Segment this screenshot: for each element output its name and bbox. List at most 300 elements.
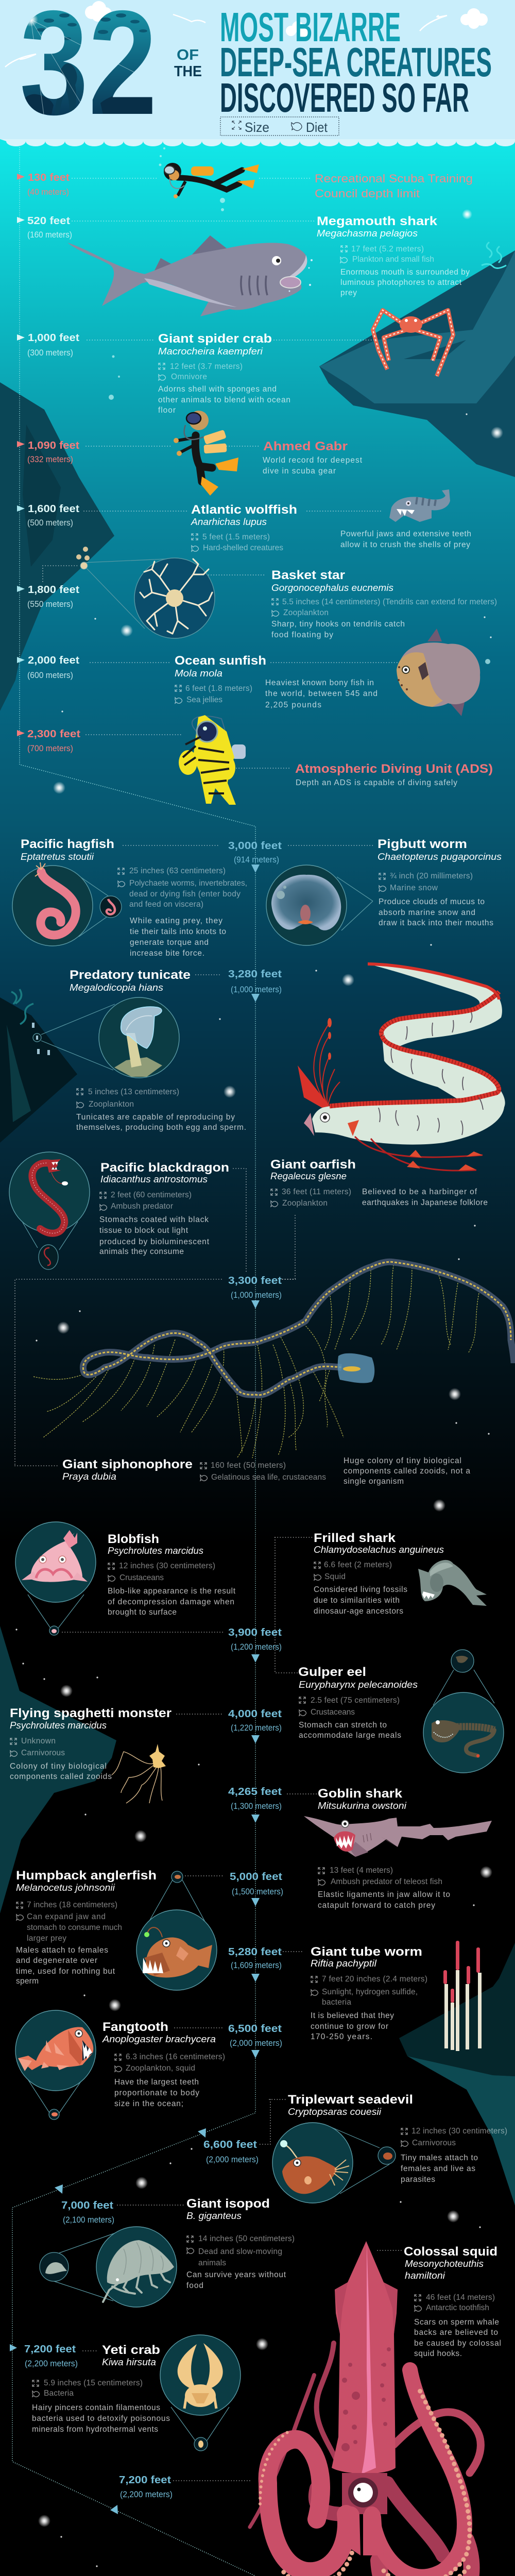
marker: 1090 feet [17, 441, 25, 447]
text: facts: sperm [16, 1977, 39, 1986]
text: facts: generate torque and [130, 938, 209, 947]
text: facts: females and live as [401, 2164, 475, 2173]
panel: pacific blackdragon: Idiacanthus antrostomus [100, 1174, 208, 1184]
name: Flying spaghetti monster [10, 1706, 171, 1720]
marker: 4000 feet: 4,000 feet [228, 1708, 282, 1720]
text: facts: 6.3 inches (16 centimeters) [126, 2053, 225, 2061]
panel: ahmed gabr [17, 411, 363, 496]
text: facts: time, used for nothing but [16, 1967, 115, 1976]
text: facts: Carnivorous [412, 2139, 456, 2147]
rock: left upper [0, 382, 114, 711]
marker: 6500 feet: (2,000 meters) [230, 2039, 282, 2048]
text: record [263, 456, 363, 476]
name: Megamouth shark [317, 214, 438, 228]
arm: main looping arms [260, 2370, 471, 2576]
text: facts [271, 1188, 488, 1208]
panel: atlantic wolffish: (500 meters) [27, 518, 73, 528]
text: facts: catapult forward to catch prey [318, 1901, 435, 1910]
clouds and birds [5, 1, 488, 67]
illustration: yeti crab zoom [160, 2335, 241, 2451]
illustration: colossal squid [250, 2241, 480, 2576]
panel: pacific blackdragon [9, 1152, 246, 1272]
text: facts: allow it to crush the shells of prey [340, 540, 470, 549]
text: facts [108, 1562, 236, 1617]
marker: 3000 feet: 3,000 feet [228, 840, 282, 852]
text: facts: absorb marine snow and [379, 908, 475, 917]
panel: goblin shark: (1,300 meters) [231, 1802, 282, 1811]
panel: yeti crab: Kiwa hirsuta [102, 2357, 156, 2367]
text: facts: Colony of tiny biological [10, 1762, 107, 1771]
rock: right deep [399, 1943, 515, 2206]
marker: 3900 feet: 3,900 feet [228, 1627, 282, 1638]
panel: basket star: Gorgonocephalus eucnemis [271, 583, 393, 593]
panel: giant tube worm [228, 1941, 482, 2051]
name: Pacific hagfish [21, 837, 114, 851]
name: Basket star [271, 568, 345, 582]
text: facts: produced by bioluminescent [99, 1238, 210, 1246]
text: facts: luminous photophores to attract [340, 278, 462, 287]
text: facts: tissue to block out light [99, 1226, 188, 1235]
text: facts: 5 inches (13 centimeters) [88, 1088, 179, 1096]
text: facts: dinosaur-age ancestors [314, 1607, 403, 1616]
text: facts: dead or dying fish (enter body [129, 890, 241, 899]
arm: far tentacles [250, 2343, 480, 2576]
panel: 130 feet scuba limit: (40 meters) [27, 188, 69, 197]
text: facts: bacteria used to detoxify poisonous [32, 2414, 170, 2423]
text: facts: bacteria [322, 1998, 351, 2007]
panel: giant isopod: B. giganteus [186, 2211, 242, 2221]
text: facts: 46 feet (14 meters) [426, 2293, 495, 2302]
text: facts: ¾ inch (20 millimeters) [390, 872, 473, 880]
text: facts: 5.9 inches (15 centimeters) [44, 2379, 143, 2387]
name: Colossal squid [404, 2245, 497, 2259]
panel: 130 feet scuba limit [17, 163, 473, 200]
text: facts [318, 1866, 450, 1910]
panel: megamouth shark: 520 feet [27, 215, 70, 227]
text: facts: food [186, 2281, 203, 2290]
name: Giant siphonophore [62, 1458, 193, 1471]
panel: yeti crab [10, 2335, 241, 2451]
text: facts: Sea jellies [186, 696, 222, 704]
text: facts: Zooplankton [282, 1199, 328, 1208]
text: facts: Can survive years without [186, 2270, 286, 2279]
text: facts: single organism [344, 1477, 404, 1486]
text: facts: components called zooids [10, 1772, 112, 1781]
text: facts: While eating prey, they [130, 917, 222, 925]
name: Blobfish [108, 1532, 159, 1546]
text: facts: Crustaceans [311, 1708, 355, 1717]
panel: giant isopod [40, 2184, 295, 2307]
illustration: siphonophore [33, 1262, 514, 1458]
text: facts: Gelatinous sea life, crustaceans [211, 1473, 326, 1482]
marker: 1600 feet [17, 505, 25, 512]
panel: giant spider crab: 1,000 feet [28, 332, 79, 344]
panel: fangtooth [15, 2010, 225, 2120]
title: big number 32 [23, 10, 152, 115]
icon: diet [291, 123, 302, 131]
text: facts: Polychaete worms, invertebrates, [129, 879, 247, 888]
text: facts [414, 2293, 501, 2358]
name: Atmospheric Diving Unit (ADS) [295, 762, 493, 776]
name: Giant isopod [186, 2197, 270, 2211]
illustration: anglerfish zoom [136, 1871, 217, 1990]
name: Giant tube worm [311, 1945, 422, 1959]
illustration: gulper eel zoom [423, 1650, 504, 1773]
legend: size and diet: Diet [306, 120, 328, 135]
text: facts [175, 679, 377, 709]
text: facts: earthquakes in Japanese folklore [362, 1198, 488, 1207]
wave edge [0, 139, 515, 146]
text: facts: minerals from hydrothermal vents [32, 2425, 158, 2434]
panel: goblin shark [228, 1786, 492, 1910]
text: facts: Plankton and small fish [352, 255, 434, 264]
panel: yeti crab: 7,200 feet [24, 2344, 76, 2355]
illustration: fangtooth zoom [15, 2010, 96, 2120]
panel: megamouth shark [17, 214, 470, 316]
text: facts: Males attach to females [16, 1946, 108, 1955]
text: facts [379, 872, 493, 927]
panel: frilled shark: Chlamydoselachus anguineus [314, 1545, 444, 1555]
text: facts: 36 feet (11 meters) [282, 1188, 351, 1196]
text: facts: 14 inches (50 centimeters) [198, 2234, 295, 2243]
text: recreational limit: Council depth limit [315, 187, 420, 200]
text: facts: 5 feet (1.5 meters) [202, 533, 270, 541]
panel: triplewart seadevil: (2,000 meters) [206, 2155, 259, 2164]
panel: frilled shark [275, 1531, 487, 1673]
name: Gulper eel [298, 1665, 366, 1679]
text: facts: Zooplankton [89, 1100, 134, 1109]
panel: giant oarfish [270, 964, 505, 1279]
panel: basket star: 1,800 feet [28, 584, 79, 596]
panel: giant spider crab: (300 meters) [27, 348, 73, 358]
name: Yeti crab [102, 2343, 160, 2357]
panel: basket star: (550 meters) [27, 600, 73, 609]
legend: size and diet: Size [245, 120, 269, 135]
panel: giant spider crab [17, 310, 453, 415]
panel: giant oarfish: Regalecus glesne [270, 1171, 347, 1181]
illustration: goblin shark [304, 1816, 492, 1857]
text: facts: Stomach can stretch to [299, 1721, 387, 1730]
text: facts: It is believed that they [311, 2011, 394, 2020]
text: facts: size in the ocean; [114, 2099, 183, 2108]
text: facts: and degenerate over [16, 1956, 97, 1965]
seaweed: upper right [482, 242, 506, 268]
panel: ahmed gabr: 1,090 feet [28, 440, 79, 451]
marker: 3000 feet: (914 meters) [234, 855, 279, 865]
text: facts: Tunicates are capable of reproducing by [76, 1113, 235, 1122]
marker: 7200 feet [10, 2344, 17, 2351]
panel: colossal squid: Mesonychoteuthis [405, 2259, 484, 2269]
illustration: underwater scene inside the numerals [21, 12, 157, 115]
text: facts: 2,205 pounds [265, 701, 321, 709]
text: facts: Squid [324, 1572, 346, 1581]
text: facts: 17 feet (5.2 meters) [351, 245, 424, 253]
text: facts [16, 1901, 122, 1986]
panel: fangtooth: Anoplogaster brachycera [102, 2034, 216, 2044]
illustration: blackdragon zoom [9, 1152, 90, 1269]
text: facts: Powerful jaws and extensive teeth [340, 530, 471, 538]
marker: 3300 feet: (1,000 meters) [231, 1291, 282, 1300]
illustration: frilled shark [418, 1560, 487, 1606]
text: facts: Hairy pincers contain filamentous [32, 2403, 160, 2412]
text: facts: 6 feet (1.8 meters) [185, 684, 252, 693]
text: facts [32, 2379, 170, 2434]
illustration: deep diver [174, 411, 238, 496]
panel: flying spaghetti monster: Psychrolutes marcidus [10, 1720, 107, 1731]
text: facts: proportionate to body [114, 2089, 199, 2097]
panel: pigbutt worm: Chaetopterus pugaporcinus [377, 852, 502, 862]
text: facts [114, 2053, 225, 2108]
panel: flying spaghetti monster [10, 1706, 224, 1803]
text: depth caption: Depth an ADS is capable of diving safely [296, 778, 457, 787]
title: of the: THE [174, 63, 202, 80]
name: Humpback anglerfish [16, 1869, 157, 1883]
depth timeline: dotted path [12, 147, 255, 2576]
text: facts: Elastic ligaments in jaw allow it to [318, 1890, 450, 1899]
name: Giant oarfish [270, 1158, 356, 1172]
head [342, 2473, 387, 2514]
marker: 4000 feet: (1,220 meters) [231, 1723, 282, 1733]
panel: gulper eel [298, 1650, 504, 1773]
text: facts [314, 1561, 407, 1616]
text: facts: 2.5 feet (75 centimeters) [311, 1696, 400, 1705]
name: Predatory tunicate [70, 968, 191, 982]
text: facts: 6.6 feet (2 meters) [324, 1561, 392, 1569]
text: facts: due to similarities with [314, 1596, 400, 1605]
text: facts: backs are believed to [414, 2328, 498, 2337]
text: facts: Ambush predator of teleost fish [331, 1877, 442, 1886]
marker: 5000 feet: 5,000 feet [230, 1871, 282, 1883]
marker: 3000 feet [228, 840, 282, 873]
text: facts: draw it back into their mouths [379, 919, 493, 927]
panel: blobfish: Psychrolutes marcidus [108, 1546, 203, 1556]
text: facts: Carnivorous [21, 1749, 65, 1757]
illustration: isopod zoom [40, 2227, 177, 2307]
name: Frilled shark [314, 1531, 396, 1545]
marker: 6500 feet [228, 2023, 282, 2058]
text: facts: components called zooids, not a [344, 1467, 470, 1476]
marker: 520 feet [17, 217, 25, 223]
text: facts: and feed on viscera) [129, 900, 203, 909]
panel: giant spider crab: Macrocheira kaempferi [158, 346, 263, 357]
text: facts: 13 feet (4 meters) [330, 1866, 393, 1875]
panel: predatory tunicate: Megalodicopia hians [70, 982, 163, 993]
illustration: wolffish [389, 489, 450, 522]
text: facts: Bacteria [44, 2389, 74, 2398]
name: Pigbutt worm [377, 837, 467, 851]
panel: megamouth shark: (160 meters) [27, 230, 72, 240]
text: facts [401, 2127, 507, 2184]
marker: 3900 feet: (1,200 meters) [231, 1642, 282, 1652]
icon: size [232, 121, 241, 129]
text: facts: 7 inches (18 centimeters) [27, 1901, 117, 1909]
panel: yeti crab: (2,200 meters) [25, 2359, 78, 2368]
text: facts [340, 245, 470, 297]
marker: 6600 feet: 6,600 feet [203, 2139, 257, 2150]
text: facts: be caused by colossal [414, 2339, 501, 2348]
text: facts: animals they consume [99, 1247, 184, 1256]
text: facts: prey [340, 289, 357, 297]
illustration: oarfish [298, 964, 505, 1171]
marker: 3280 feet: 3,280 feet [228, 969, 282, 980]
text: facts: Have the largest teeth [114, 2078, 199, 2087]
panel: 130 feet scuba limit: 130 feet [28, 172, 70, 183]
panel: blobfish [15, 1522, 236, 1635]
text: facts [10, 1737, 112, 1781]
text: facts: Adorns shell with sponges and [158, 385, 277, 394]
text: facts [99, 1191, 210, 1256]
panel: colossal squid: hamiltoni [405, 2270, 445, 2281]
panel: ocean sunfish: Mola mola [175, 668, 222, 679]
marker: 3900 feet [228, 1627, 282, 1663]
marker: 2000 feet [17, 657, 25, 663]
text: facts [158, 362, 290, 415]
illustration: megamouth shark [67, 235, 313, 316]
panel: colossal squid [250, 2241, 501, 2576]
text: facts: Can expand jaw and [27, 1912, 106, 1921]
text: facts: larger prey [27, 1934, 66, 1943]
name: Ocean sunfish [175, 654, 266, 668]
illustration: blobfish zoom [15, 1522, 96, 1635]
text: facts: floor [158, 406, 176, 415]
panel: humpback anglerfish: Melanocetus johnsonii [16, 1883, 115, 1893]
panel: atlantic wolffish: 1,600 feet [28, 503, 79, 515]
name: Atlantic wolffish [191, 503, 297, 517]
text: facts [192, 530, 471, 552]
name: Fangtooth [102, 2020, 168, 2034]
panel: atlantic wolffish: Anarhichas lupus [191, 517, 267, 527]
legend: size and diet [220, 117, 339, 135]
text: facts: Crustaceans [119, 1573, 164, 1582]
marker: 3280 feet [228, 969, 282, 1002]
text: facts: Omnivore [171, 372, 207, 381]
marker: 4265 feet: 4,265 feet [228, 1786, 282, 1798]
marker: 7200 feet squid [110, 2475, 250, 2514]
panel: giant siphonophore: Praya dubia [62, 1471, 116, 1482]
panel: pigbutt worm [266, 837, 502, 945]
name: Ahmed Gabr [263, 439, 348, 453]
text: facts: Zooplankton, squid [126, 2064, 195, 2073]
text: facts: parasites [401, 2175, 435, 2184]
text: record: World record for deepest [263, 456, 363, 465]
marker: 5000 feet [230, 1871, 283, 1906]
panel: atmospheric diving unit [17, 715, 493, 805]
text: facts: 5.5 inches (14 centimeters) (Tendrils can extend for meters) [282, 598, 497, 606]
illustration: ocean sunfish [397, 629, 480, 716]
text: recreational limit: Recreational Scuba Training [315, 172, 473, 185]
title: most bizarre deep-sea creatures discovered so far [220, 4, 492, 121]
text: facts [186, 2234, 295, 2290]
panel: giant tube worm: (1,609 meters) [231, 1961, 282, 1970]
text: facts [76, 1088, 246, 1132]
panel: atlantic wolffish [17, 489, 471, 552]
text: facts: Produce clouds of mucus to [379, 897, 485, 906]
panel: triplewart seadevil [198, 2093, 507, 2203]
marker: 6500 feet: 6,500 feet [228, 2023, 282, 2035]
panel: triplewart seadevil: Cryptopsaras couesii [288, 2107, 382, 2117]
panel: giant tube worm: Riftia pachyptil [311, 1958, 377, 1969]
panel: gulper eel: Eurypharynx pelecanoides [299, 1680, 418, 1690]
text: facts: 12 inches (30 centimeters) [119, 1562, 215, 1570]
text: facts [311, 1975, 427, 2041]
text: facts: animals [198, 2259, 226, 2267]
marker: 3280 feet: (1,000 meters) [231, 985, 282, 994]
text: facts: Sunlight, hydrogen sulfide, [322, 1988, 418, 1996]
panel: predatory tunicate [32, 968, 246, 1132]
panel: pacific hagfish [12, 837, 247, 958]
text: facts: 170-250 years. [311, 2032, 372, 2041]
text: facts: Blob-like appearance is the result [108, 1587, 236, 1596]
text: facts: the world, between 545 and [265, 689, 377, 698]
illustration: ADS suit [179, 715, 246, 805]
text: facts: Ambush predator [111, 1202, 173, 1211]
text: facts: food floating by [271, 631, 333, 639]
text: facts: Believed to be a harbinger of [362, 1188, 477, 1196]
text: facts: other animals to blend with ocean [158, 396, 290, 404]
text: facts: 7 feet 20 inches (2.4 meters) [322, 1975, 427, 1984]
panel: pacific hagfish: Eptatretus stoutii [21, 852, 94, 862]
panel: ocean sunfish: 2,000 feet [28, 655, 79, 666]
text: facts: tie their tails into knots to [130, 927, 226, 936]
name: Giant spider crab [158, 332, 272, 346]
text: facts: 12 inches (30 centimeters) [411, 2127, 507, 2136]
text: facts: 160 feet (50 meters) [211, 1461, 286, 1470]
illustration: tunicate zoom [32, 997, 179, 1078]
text: facts: 12 feet (3.7 meters) [170, 362, 243, 371]
text: facts: Enormous mouth is surrounded by [340, 268, 470, 277]
text: facts: Stomachs coated with black [99, 1215, 209, 1224]
text: facts: Considered living fossils [314, 1585, 407, 1594]
marker: 4000 feet [228, 1708, 282, 1743]
text: facts [200, 1456, 470, 1486]
rock: upper right [319, 250, 515, 477]
text: facts: Heaviest known bony fish in [265, 679, 374, 687]
text: facts: Sharp, tiny hooks on tendrils catch [271, 620, 405, 629]
text: facts: Antarctic toothfish [426, 2303, 489, 2312]
text: facts: of decompression damage when [108, 1598, 234, 1606]
illustration: tube worms [443, 1941, 482, 2051]
text: facts: Marine snow [390, 884, 438, 892]
text: facts: squid hooks. [414, 2349, 462, 2358]
rock: left mid with seaweed [0, 989, 77, 1143]
text: facts [118, 867, 247, 958]
marker: 5280 feet: 5,280 feet [228, 1946, 282, 1958]
text: facts: themselves, producing both egg and sperm. [76, 1123, 246, 1132]
text: facts: Tiny males attach to [401, 2154, 478, 2162]
text: facts: 25 inches (63 centimeters) [129, 867, 226, 875]
panel: atmospheric diving unit: 2,300 feet [27, 728, 80, 740]
panel: giant isopod: (2,100 meters) [63, 2215, 114, 2225]
panel: ocean sunfish [17, 629, 480, 716]
rock: left deep [0, 1626, 116, 1913]
name: Pacific blackdragon [100, 1161, 229, 1175]
text: facts: increase bite force. [130, 949, 204, 958]
illustration: hagfish zoom [12, 862, 122, 946]
marker: 7200 feet squid: (2,200 meters) [120, 2490, 173, 2499]
title: of the [174, 47, 202, 80]
text: record: dive in scuba gear [263, 467, 336, 476]
text: recreational limit [315, 172, 473, 200]
panel: ocean sunfish: (600 meters) [27, 671, 73, 680]
title: of the: OF [177, 47, 199, 63]
text: facts: Unknown [21, 1737, 56, 1745]
marker: 130 feet [17, 174, 25, 180]
text: facts: Huge colony of tiny biological [344, 1456, 461, 1465]
marker: 5000 feet: (1,500 meters) [232, 1887, 283, 1896]
name: Triplewart seadevil [288, 2093, 413, 2107]
panel: giant isopod: 7,000 feet [61, 2200, 113, 2211]
marker: 3300 feet [15, 1275, 296, 1464]
